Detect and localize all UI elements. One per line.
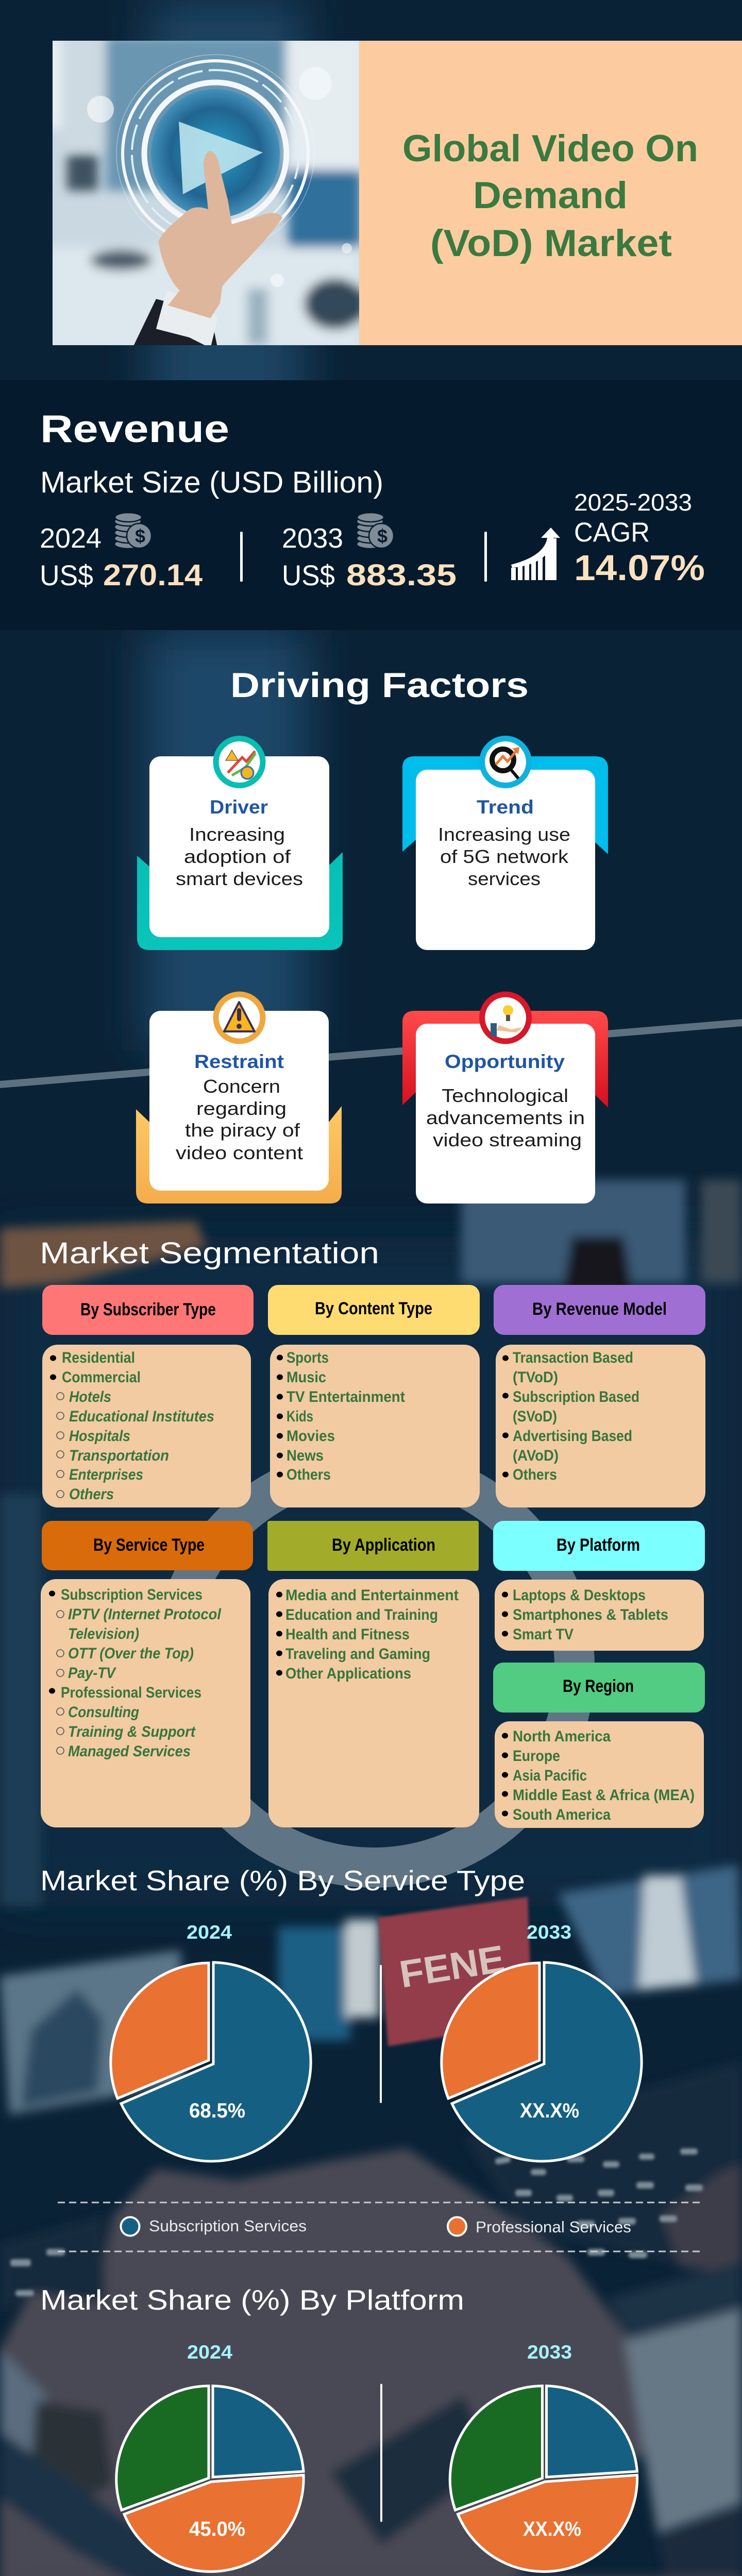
- panel: driver: Driver: [210, 796, 268, 818]
- icon: trend: [479, 736, 532, 788]
- list: service types: IPTV (Internet Protocol: [68, 1606, 222, 1623]
- panel: by subscriber type: By Subscriber Type: [80, 1300, 216, 1319]
- list: revenue models: [502, 1349, 639, 1483]
- list: content types: News: [286, 1447, 324, 1464]
- list: subscriber types: Hotels: [69, 1388, 111, 1405]
- chart: service type pie 2024: [111, 1922, 311, 2161]
- list: content types: Movies: [286, 1428, 335, 1445]
- list: platforms: Smartphones & Tablets: [513, 1606, 668, 1623]
- icon: coins 2024: [114, 513, 151, 549]
- revenue heading: Revenue: [40, 407, 229, 450]
- list: applications: Other Applications: [285, 1665, 411, 1682]
- list: regions: Asia Pacific: [513, 1767, 587, 1784]
- legend: service type: [58, 2202, 700, 2251]
- chart: platform pie 2024: [116, 2342, 303, 2571]
- list: content types: Music: [286, 1369, 326, 1386]
- CAGR: CAGR: [574, 517, 650, 548]
- chart: platform pie 2033: XX.X%: [523, 2518, 581, 2540]
- list: service types: [49, 1586, 222, 1760]
- list: regions: [502, 1728, 695, 1823]
- panel: trend: Trend: [477, 796, 534, 818]
- list: content types: Others: [286, 1466, 331, 1483]
- list: regions: North America: [513, 1728, 611, 1745]
- legend: service type: Subscription Services: [149, 2217, 307, 2235]
- icon: coins 2024: $: [135, 526, 145, 547]
- chart: service type pie 2033: 2033: [527, 1922, 571, 1943]
- hero photo: finger pressing play button: [46, 36, 366, 350]
- list: service types: Training & Support: [68, 1723, 196, 1740]
- list: regions: South America: [513, 1806, 611, 1823]
- legend: service type: Professional Services: [476, 2218, 631, 2236]
- panel: by content type: [268, 1285, 480, 1507]
- chart: platform pie 2024: 2024: [187, 2342, 232, 2363]
- chart: service type pie 2024: 68.5%: [189, 2099, 245, 2122]
- list: revenue models: Transaction Based: [513, 1349, 633, 1366]
- list: subscriber types: Residential: [62, 1349, 135, 1366]
- title: (VoD) Market: [430, 223, 672, 264]
- market size subheading: Market Size (USD Billion): [40, 466, 383, 499]
- chart: platform pie 2033: [450, 2342, 637, 2571]
- trend text: of 5G network: [440, 846, 569, 867]
- panel: by service type: [41, 1521, 253, 1827]
- heading: market share by service type: Market Share (%) By Service Type: [40, 1865, 525, 1896]
- restraint text: the piracy of: [185, 1120, 300, 1141]
- panel: by application: [267, 1521, 479, 1827]
- list: applications: Traveling and Gaming: [285, 1646, 430, 1663]
- list: service types: OTT (Over the Top): [68, 1645, 194, 1662]
- revenue 2033: 883.35: [346, 558, 457, 592]
- driver text: smart devices: [176, 868, 303, 889]
- list: applications: Education and Training: [285, 1606, 438, 1623]
- trend text: services: [468, 868, 541, 889]
- opportunity text: [426, 1085, 585, 1150]
- icon: coins 2033: $: [377, 526, 387, 547]
- panel: restraint: [136, 991, 342, 1204]
- list: applications: Media and Entertainment: [285, 1587, 459, 1604]
- opportunity text: advancements in: [426, 1107, 585, 1128]
- panel: restraint: Restraint: [194, 1051, 284, 1072]
- panel: by service type: By Service Type: [93, 1535, 205, 1555]
- restraint text: [176, 1076, 303, 1163]
- list: subscriber types: Educational Institutes: [69, 1408, 214, 1425]
- opportunity text: Technological: [442, 1085, 568, 1106]
- heading: driving factors: Driving Factors: [230, 666, 529, 705]
- panel: trend: [402, 736, 608, 950]
- list: service types: Pay-TV: [68, 1665, 117, 1682]
- revenue 2024: US$: [40, 559, 93, 591]
- restraint text: video content: [176, 1142, 303, 1163]
- title: [402, 128, 698, 264]
- panel: revenue: [0, 380, 742, 630]
- hand: [132, 151, 282, 348]
- title: Global Video On: [402, 128, 698, 170]
- play button rings: [116, 55, 314, 252]
- list: service types: Professional Services: [61, 1684, 201, 1701]
- list: regions: Middle East & Africa (MEA): [513, 1787, 695, 1804]
- restraint text: Concern: [203, 1076, 280, 1097]
- list: revenue models: Advertising Based: [513, 1428, 632, 1445]
- icon: driver: [213, 736, 266, 788]
- divider: [380, 1965, 382, 2103]
- panel: opportunity: [402, 991, 608, 1204]
- panel: by platform: By Platform: [556, 1535, 640, 1555]
- chart: platform pie 2024: 45.0%: [189, 2518, 245, 2540]
- list: regions: Europe: [513, 1748, 560, 1765]
- list: subscriber types: Transportation: [69, 1447, 169, 1464]
- panel: by application: By Application: [332, 1535, 435, 1555]
- CAGR: 14.07%: [574, 548, 705, 588]
- revenue 2024: 270.14: [103, 558, 203, 592]
- list: platforms: Smart TV: [513, 1626, 574, 1643]
- panel: by subscriber type: [42, 1285, 254, 1507]
- list: subscriber types: Commercial: [62, 1369, 141, 1386]
- list: content types: Sports: [286, 1349, 329, 1366]
- heading: market segmentation: Market Segmentation: [40, 1236, 379, 1270]
- revenue 2024: [40, 523, 203, 592]
- panel: by revenue model: By Revenue Model: [532, 1299, 667, 1319]
- list: revenue models: Subscription Based: [513, 1388, 639, 1405]
- panel: opportunity: Opportunity: [445, 1051, 565, 1072]
- panel: by region: By Region: [563, 1676, 634, 1696]
- list: subscriber types: Others: [69, 1486, 114, 1503]
- list: platforms: [502, 1587, 668, 1643]
- list: platforms: Laptops & Desktops: [513, 1587, 646, 1604]
- revenue 2033: [282, 523, 457, 592]
- icon: coins 2033: [357, 513, 394, 549]
- icon: opportunity: [479, 991, 532, 1044]
- chart: service type pie 2033: [442, 1922, 642, 2161]
- driver text: Increasing: [189, 824, 285, 845]
- driver text: adoption of: [184, 846, 291, 867]
- list: service types: Television): [68, 1625, 139, 1642]
- title: Demand: [473, 175, 628, 216]
- driver text: [176, 824, 303, 889]
- CAGR: 2025-2033: [574, 489, 692, 516]
- divider: [380, 2384, 382, 2522]
- list: content types: TV Entertainment: [286, 1388, 405, 1405]
- panel: by region: [493, 1663, 705, 1828]
- restraint text: regarding: [196, 1098, 286, 1119]
- opportunity text: video streaming: [433, 1129, 582, 1150]
- divider: [484, 532, 487, 582]
- CAGR: [574, 489, 705, 588]
- list: service types: Consulting: [68, 1704, 139, 1721]
- panel: driver: [137, 736, 343, 950]
- chart: service type pie 2033: XX.X%: [520, 2099, 579, 2122]
- list: revenue models: (AVoD): [513, 1447, 559, 1464]
- list: revenue models: Others: [513, 1466, 557, 1483]
- background photo collage: FENE: [397, 1937, 508, 1996]
- revenue 2033: US$: [282, 559, 335, 591]
- list: revenue models: (TVoD): [513, 1369, 558, 1386]
- list: subscriber types: Enterprises: [69, 1466, 143, 1483]
- list: applications: Health and Fitness: [285, 1626, 410, 1643]
- list: subscriber types: Hospitals: [69, 1428, 130, 1445]
- icon: growth chart arrow: [511, 528, 560, 580]
- title panel: [359, 41, 742, 345]
- panel: by platform: [493, 1521, 705, 1651]
- list: applications: [276, 1587, 459, 1682]
- panel: by content type: By Content Type: [315, 1299, 432, 1318]
- revenue 2024: 2024: [40, 523, 102, 554]
- chart: platform pie 2033: 2033: [527, 2342, 572, 2363]
- divider: [240, 532, 243, 582]
- list: service types: Managed Services: [68, 1743, 191, 1760]
- list: content types: Kids: [286, 1408, 313, 1425]
- icon: restraint: [213, 991, 266, 1044]
- trend text: Increasing use: [438, 824, 570, 845]
- list: subscriber types: [50, 1349, 214, 1503]
- list: revenue models: (SVoD): [513, 1408, 557, 1425]
- trend text: [438, 824, 570, 889]
- chart: service type pie 2024: 2024: [187, 1922, 232, 1943]
- revenue 2033: 2033: [282, 523, 343, 554]
- list: service types: Subscription Services: [61, 1586, 203, 1603]
- list: content types: [277, 1349, 405, 1483]
- panel: by revenue model: [494, 1285, 705, 1507]
- heading: market share by platform: Market Share (%) By Platform: [40, 2284, 464, 2316]
